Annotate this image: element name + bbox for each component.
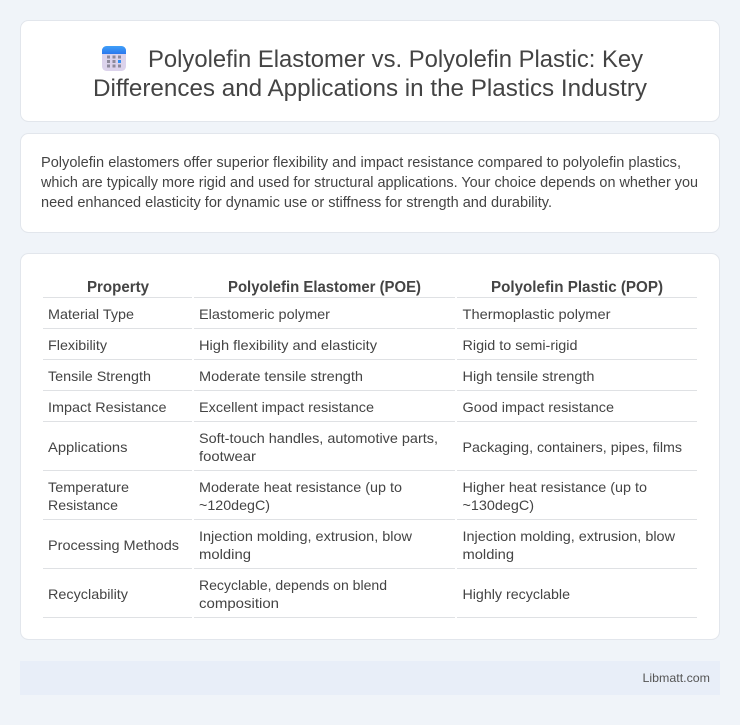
table header: Property xyxy=(87,279,149,296)
row: impact resistance: Impact Resistance xyxy=(48,399,167,415)
summary text: Polyolefin elastomers offer superior flexibility and impact resistance compared to polyolefin plastics, xyxy=(41,155,681,171)
row: tensile strength xyxy=(48,368,594,384)
row: recyclability: composition xyxy=(199,595,279,611)
row: flexibility: High flexibility and elasticity xyxy=(199,337,377,353)
panel: summary xyxy=(20,134,720,232)
row: impact resistance xyxy=(48,399,614,415)
row: recyclability: Highly recyclable xyxy=(462,586,570,602)
row: processing methods: molding xyxy=(462,546,514,562)
row: processing methods: molding xyxy=(199,546,251,562)
row: recyclability: Recyclability xyxy=(48,586,128,602)
row: flexibility: Flexibility xyxy=(48,337,107,353)
panel: comparison table xyxy=(20,254,720,640)
row: material type: Elastomeric polymer xyxy=(199,306,330,322)
footer credit: Libmatt.com xyxy=(642,671,710,685)
row: flexibility: Rigid to semi-rigid xyxy=(462,337,578,353)
row: tensile strength: Tensile Strength xyxy=(48,368,151,384)
row: temperature resistance: ~120degC) xyxy=(199,497,270,513)
panel: title card xyxy=(20,20,720,122)
row: applications xyxy=(48,430,682,464)
row: flexibility xyxy=(48,337,578,353)
row: processing methods xyxy=(48,528,676,562)
row: temperature resistance: Moderate heat resistance (up to xyxy=(199,479,402,495)
table header: Polyolefin Elastomer (POE) xyxy=(228,279,421,296)
row: processing methods: Processing Methods xyxy=(48,537,179,553)
row: temperature resistance: Resistance xyxy=(48,497,118,513)
row: material type: Material Type xyxy=(48,306,134,322)
row: recyclability xyxy=(48,577,570,611)
icon: calendar grid xyxy=(102,46,126,71)
row: impact resistance: Excellent impact resistance xyxy=(199,399,374,415)
summary text: which are typically more rigid and used for structural applications. Your choice depends on whether you xyxy=(40,175,698,191)
row: temperature resistance: ~130degC) xyxy=(462,497,534,513)
row: impact resistance: Good impact resistance xyxy=(462,399,614,415)
row: temperature resistance xyxy=(48,479,647,513)
summary text xyxy=(40,155,698,211)
row: material type: Thermoplastic polymer xyxy=(462,306,611,322)
row: applications: Soft-touch handles, automotive parts, xyxy=(199,430,438,446)
row: temperature resistance: Higher heat resistance (up to xyxy=(462,479,647,495)
title xyxy=(93,46,647,102)
row: tensile strength: Moderate tensile strength xyxy=(199,368,363,384)
row: recyclability: Recyclable, depends on blend xyxy=(199,577,387,593)
row: processing methods: Injection molding, extrusion, blow xyxy=(199,528,413,544)
row: temperature resistance: Temperature xyxy=(48,479,129,495)
table header xyxy=(87,279,663,296)
footer xyxy=(20,661,720,695)
row: material type xyxy=(48,306,611,322)
row: applications: footwear xyxy=(199,448,256,464)
row: applications: Packaging, containers, pipes, films xyxy=(462,439,682,455)
row: processing methods: Injection molding, extrusion, blow xyxy=(462,528,676,544)
title: Differences and Applications in the Plastics Industry xyxy=(93,75,647,102)
row: applications: Applications xyxy=(48,439,128,455)
summary text: need enhanced elasticity for dynamic use or stiffness for strength and durability. xyxy=(41,195,552,211)
title: Polyolefin Elastomer vs. Polyolefin Plastic: Key xyxy=(148,46,643,73)
table header: Polyolefin Plastic (POP) xyxy=(491,279,663,296)
row: tensile strength: High tensile strength xyxy=(462,368,594,384)
